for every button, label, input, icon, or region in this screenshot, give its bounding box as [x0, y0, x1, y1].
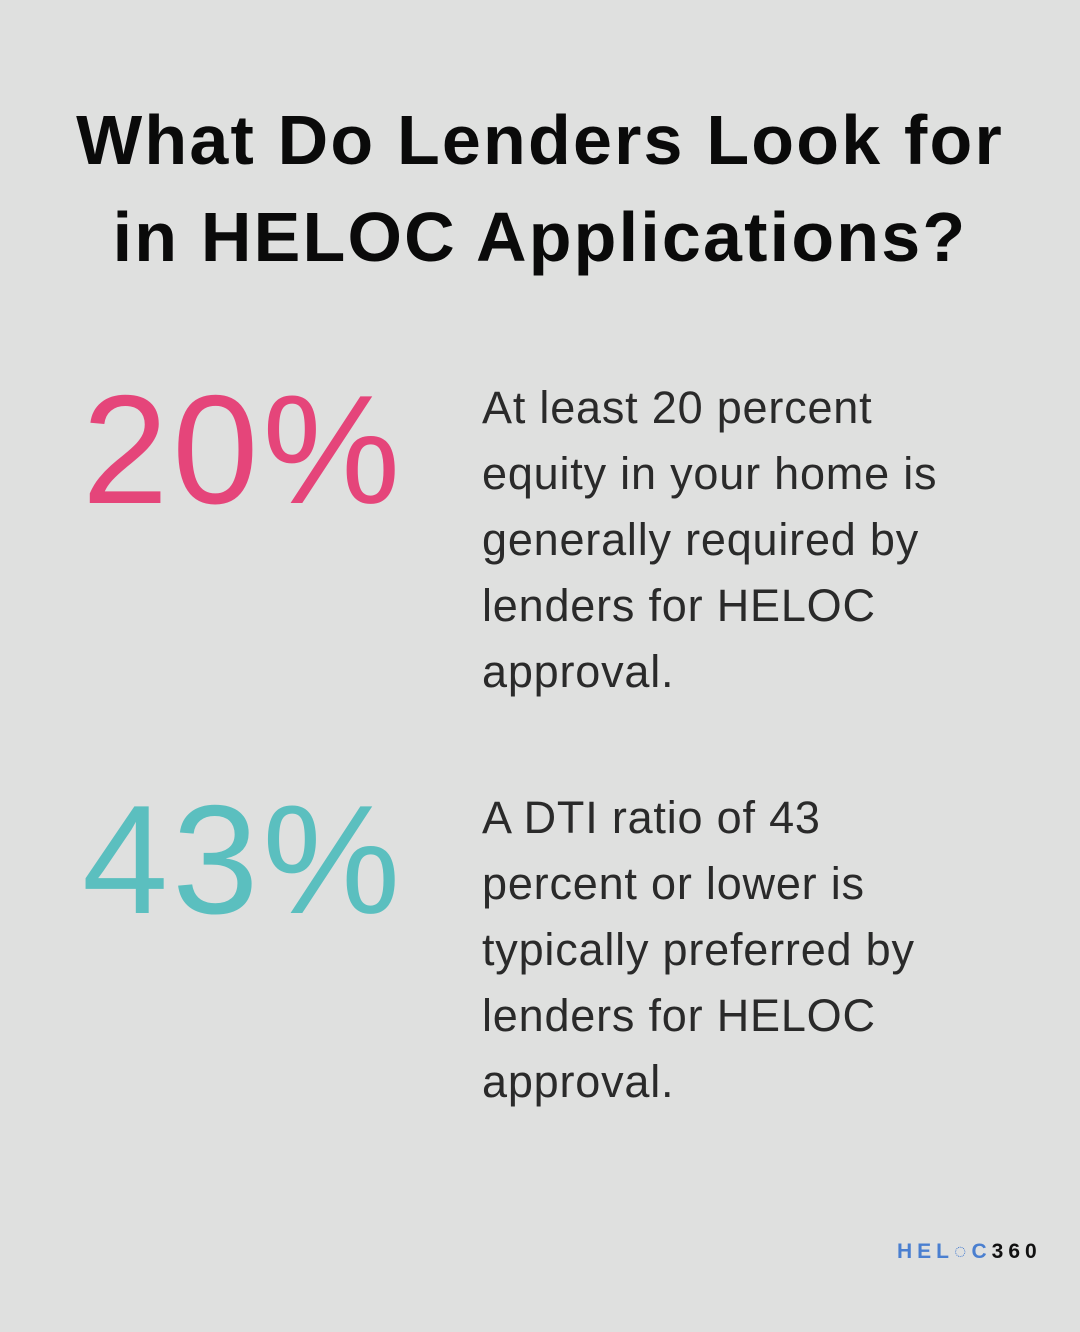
stat: 43%: 43% — [82, 773, 404, 946]
text: DTI ratio — [482, 792, 915, 1107]
text: DTI ratio: approval. — [482, 1056, 674, 1107]
text: equity requirement: lenders for HELOC — [482, 580, 876, 631]
logo: HEL◌C360 — [897, 1240, 1042, 1263]
text: equity requirement: equity in your home is — [482, 448, 937, 499]
text: DTI ratio: lenders for HELOC — [482, 990, 876, 1041]
text: equity requirement: approval. — [482, 646, 674, 697]
text: equity requirement: At least 20 percent — [482, 382, 872, 433]
title: in HELOC Applications? — [113, 198, 967, 276]
text: equity requirement — [482, 382, 937, 697]
title: What Do Lenders Look for — [76, 101, 1004, 179]
stat: 20%: 20% — [82, 363, 404, 536]
text: DTI ratio: typically preferred by — [482, 924, 915, 975]
text: DTI ratio: percent or lower is — [482, 858, 865, 909]
text: equity requirement: generally required by — [482, 514, 919, 565]
text: DTI ratio: A DTI ratio of 43 — [482, 792, 821, 843]
title — [76, 101, 1004, 276]
